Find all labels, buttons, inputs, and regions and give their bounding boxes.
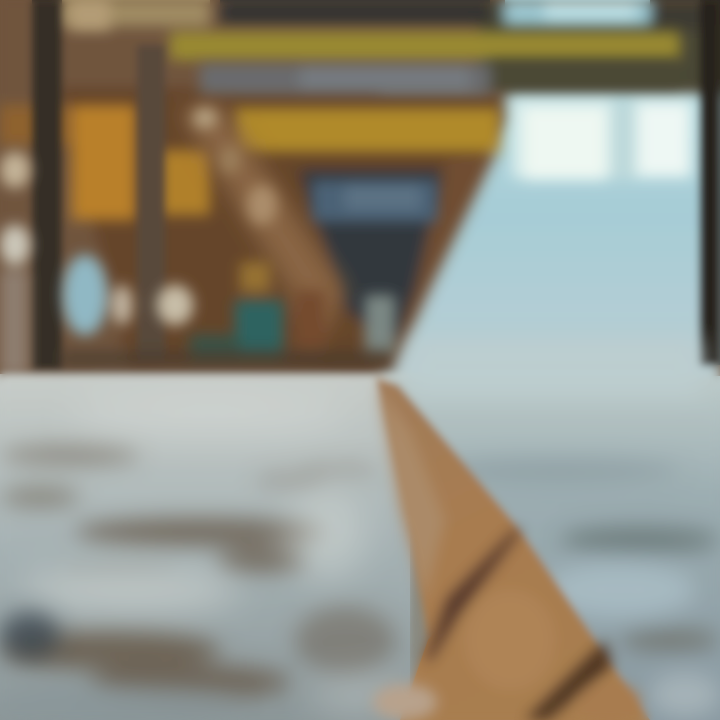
pile texture: right [440,458,720,717]
pile: right side [385,376,720,720]
blue panel on the hopper [312,180,437,222]
background: upper structure [0,0,720,380]
pile: transition on the right [410,340,700,395]
diagonal ladder [180,105,345,340]
yellow beams [0,0,680,220]
teal machinery at the hopper base [190,262,395,360]
brown wedge [376,378,650,720]
lower left blue and white patches [63,255,193,335]
wedge shading [373,385,640,720]
dark band along the hopper base [60,350,390,368]
top right: dark beam and window [220,0,720,92]
left dark column [32,0,165,370]
pile shadow: lower left [0,611,240,720]
background: pale blue bright area on the right [380,90,720,390]
left side pale highlights [0,0,110,375]
grey band under the top yellow beam [200,60,680,94]
bright windows on the right [512,100,692,180]
right dark column [700,0,720,365]
pile: left side [0,374,410,720]
pile texture: left [0,444,395,700]
pile highlights: left [20,391,410,715]
hopper funnel body [60,88,505,372]
